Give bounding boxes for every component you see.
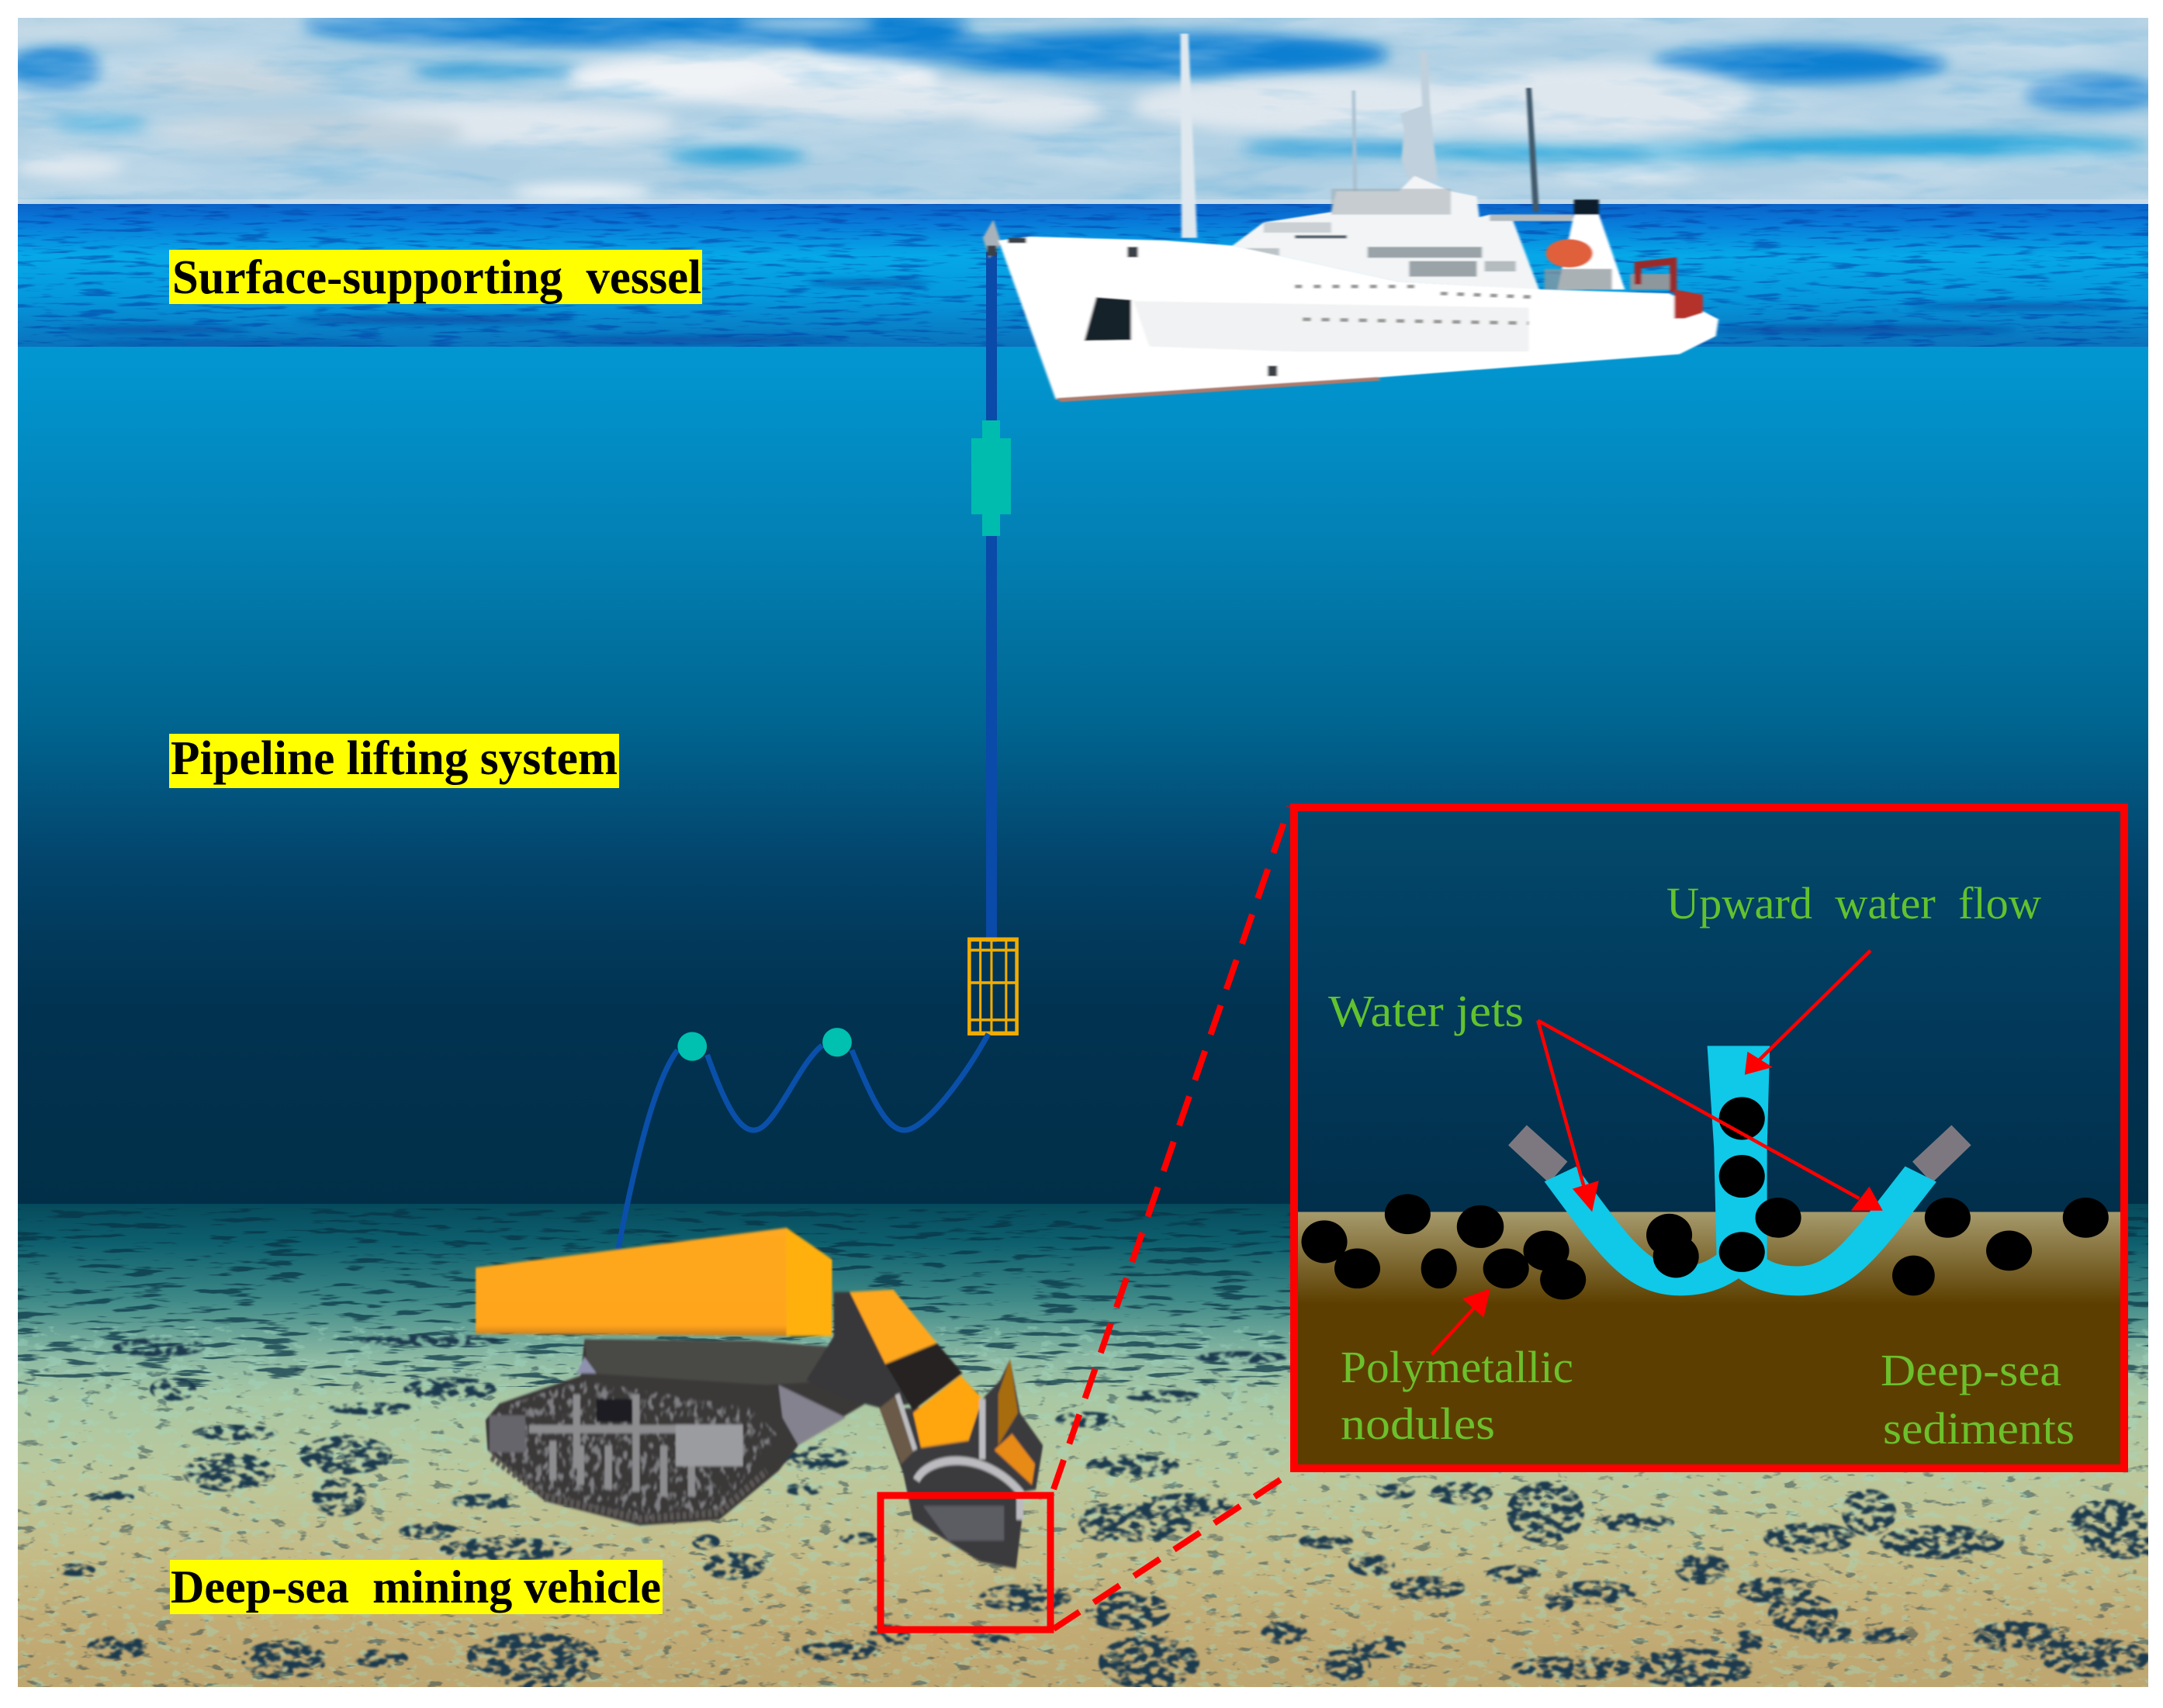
relay buoyancy module xyxy=(971,420,1011,536)
seabed with nodules xyxy=(18,1204,2161,1689)
nodules xyxy=(1301,1097,2109,1300)
arrowheads xyxy=(1462,1052,1883,1317)
tracked chassis xyxy=(486,1340,881,1526)
hull shade xyxy=(1133,301,1528,351)
label: pipeline lifting system: Pipeline lifting system xyxy=(171,732,618,785)
portholes xyxy=(1295,286,1539,323)
funnel xyxy=(1557,199,1625,289)
label: polymetallic nodules: Polymetallic xyxy=(1341,1342,1573,1392)
superstructure shading xyxy=(1237,188,1573,277)
bow tip xyxy=(983,220,1001,258)
water jet pipes xyxy=(1560,1174,1921,1281)
waterline xyxy=(1056,377,1381,402)
hull hatch xyxy=(1085,297,1131,341)
suction tube xyxy=(1708,1046,1770,1263)
collector frame xyxy=(898,1394,1020,1520)
arm backing and collector head xyxy=(880,1360,1043,1568)
sky with clouds xyxy=(0,2,2163,204)
linkage arm xyxy=(806,1292,913,1408)
track lattice xyxy=(529,1394,735,1496)
label: deep-sea sediments: Deep-sea xyxy=(1881,1345,2061,1395)
label: polymetallic nodules: nodules xyxy=(1341,1399,1495,1449)
orange arm covers xyxy=(850,1290,982,1464)
label: upward water flow: Upward water flow xyxy=(1666,878,2041,928)
track detail xyxy=(490,1399,767,1519)
inset panel: collection principle xyxy=(1294,807,2124,1468)
red detail box on collector xyxy=(881,1495,1050,1630)
label: water jets: Water jets xyxy=(1328,986,1524,1036)
deep water gradient xyxy=(18,347,2148,1212)
sea surface band xyxy=(18,204,2148,347)
intermediate cage xyxy=(969,939,1017,1033)
label: deep-sea mining vehicle: Deep-sea mining vehicle xyxy=(171,1561,661,1613)
hull xyxy=(998,237,1718,399)
masts xyxy=(1181,33,1539,238)
orange buoyancy box xyxy=(476,1228,832,1336)
label: surface-supporting vessel: Surface-supporting vessel xyxy=(172,251,701,304)
stern deck gear xyxy=(1545,269,1674,289)
panel drawing xyxy=(1295,950,2122,1468)
panel water background xyxy=(1294,807,2124,1212)
deep-sea mining vehicle xyxy=(476,1228,1043,1568)
collector fin orange xyxy=(995,1433,1035,1485)
sediment layer xyxy=(1295,1212,2122,1468)
collector intake xyxy=(923,1506,1004,1540)
label: polymetallic nodules xyxy=(1341,1342,1573,1449)
collector fin xyxy=(998,1360,1018,1445)
panel border xyxy=(1294,807,2124,1468)
surface-supporting vessel xyxy=(983,33,1718,402)
track texture xyxy=(493,1381,778,1520)
superstructure xyxy=(1233,176,1573,289)
flexible hose with buoys xyxy=(618,1028,988,1249)
rigid riser pipe xyxy=(986,252,997,942)
label: deep-sea sediments xyxy=(1881,1345,2075,1454)
nozzles xyxy=(1508,1125,1971,1183)
dashed zoom connector lines xyxy=(1054,807,1289,1629)
deck marks xyxy=(987,238,1277,376)
stern crane xyxy=(1638,261,1703,319)
lifeboat xyxy=(1546,239,1593,268)
label: deep-sea sediments: sediments xyxy=(1883,1403,2075,1454)
red arrows xyxy=(1431,950,1871,1354)
pipeline lifting system xyxy=(618,252,1017,1249)
